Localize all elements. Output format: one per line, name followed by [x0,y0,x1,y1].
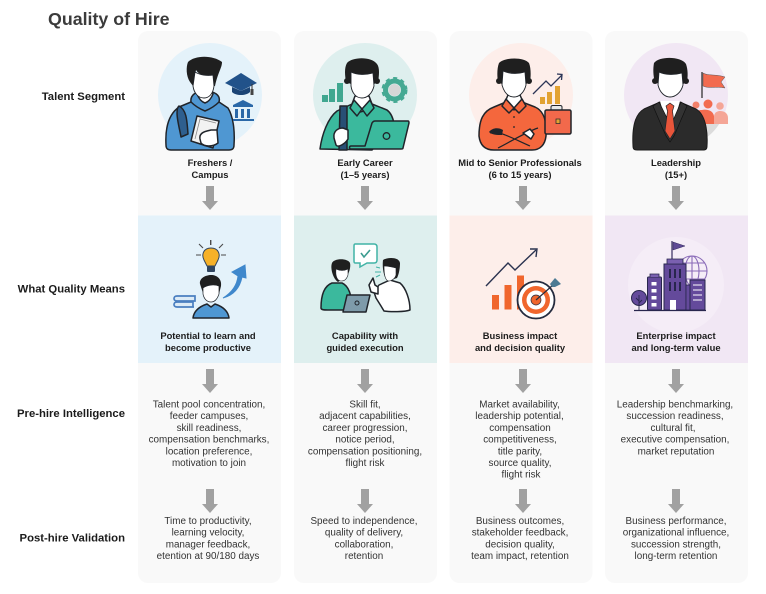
text: post-hire freshers: manager feedback, [166,539,250,550]
text: pre-hire leadership: succession readiness, [626,411,724,422]
label: Potential to learn and become productive: Potential to learn and [160,330,256,341]
text: pre-hire mid-senior: flight risk [502,470,541,481]
label: Business impact and decision quality: Business impact [483,330,557,341]
icon: target and growth chart [486,249,561,318]
text: post-hire early career: quality of delivery, [325,528,403,539]
label: Capability with guided execution: Capability with [332,330,398,341]
arrow [202,489,218,513]
panel: Leadership [605,31,748,583]
label: Capability with guided execution: guided execution [326,342,404,353]
text: pre-hire freshers: skill readiness, [177,423,241,434]
text: post-hire freshers: learning velocity, [172,528,244,539]
icon: fresher student [158,43,262,150]
text: pre-hire freshers: motivation to join [172,458,246,469]
text: pre-hire leadership: Leadership benchmarking, [617,400,733,410]
text: pre-hire leadership: market reputation [638,446,714,457]
row label: Post-hire Validation: Post-hire Validation [20,532,125,544]
text: pre-hire leadership: executive compensation, [621,435,729,446]
text: pre-hire mid-senior: source quality, [489,458,551,469]
text: post-hire mid-senior: decision quality, [485,539,555,550]
label: Enterprise impact and long-term value: and long-term value [631,342,721,353]
row label: Pre-hire Intelligence: Pre-hire Intelligence [17,408,125,420]
arrow [515,186,531,210]
label: Freshers / Campus: Campus [192,169,228,180]
icon: enterprise buildings and globe [628,237,724,333]
panel: Mid to Senior Professionals [450,31,592,583]
label: Potential to learn and become productive: become productive [165,342,251,353]
text: post-hire early career: retention [345,551,383,562]
arrow [202,369,218,393]
icon: learner with bulb and books [174,240,246,318]
text: pre-hire mid-senior: Market availability, [479,400,560,410]
text: post-hire mid-senior: stakeholder feedback, [472,528,568,539]
icon: leader [624,43,728,150]
arrow [357,489,373,513]
text: pre-hire freshers: location preference, [166,446,252,457]
text: pre-hire freshers: feeder campuses, [170,411,248,422]
text: post-hire leadership: succession strength, [631,539,721,550]
text: pre-hire leadership: cultural fit, [650,423,696,434]
text: post-hire mid-senior: Business outcomes, [476,516,564,527]
row label: Talent Segment: Talent Segment [42,91,125,103]
label: Leadership (15+): (15+) [665,169,687,180]
arrow [357,369,373,393]
arrow [668,489,684,513]
icon: early career professional [313,43,417,150]
arrow [668,186,684,210]
text: post-hire mid-senior: team impact, retention [471,551,569,562]
text: post-hire early career: collaboration, [335,539,393,550]
icon: mid-senior professional [469,43,573,150]
text: pre-hire mid-senior: leadership potential, [475,411,564,422]
text: pre-hire early career: Skill fit, [349,400,381,410]
text: pre-hire early career: career progression, [322,423,408,434]
text: pre-hire early career: compensation positioning, [308,446,422,457]
text: pre-hire mid-senior: title parity, [498,446,542,457]
text: pre-hire early career: notice period, [335,435,395,446]
arrow [668,369,684,393]
label: Early Career (1–5 years): Early Career [337,157,393,168]
text: pre-hire early career: adjacent capabilities, [319,411,411,422]
text: post-hire freshers: Time to productivity, [164,516,252,527]
label: Leadership (15+): Leadership [651,157,701,168]
label: Early Career (1–5 years): (1–5 years) [340,169,390,180]
label: Freshers / Campus: Freshers / [188,157,233,168]
text: post-hire early career: Speed to independence, [310,516,418,527]
arrow [357,186,373,210]
panel: Early Career [294,31,437,583]
text: post-hire leadership: long-term retention [635,551,717,562]
label: Mid to Senior Professionals (6 to 15 years): (6 to 15 years) [488,169,552,180]
text: post-hire freshers: etention at 90/180 days [157,551,259,562]
text: pre-hire early career: flight risk [346,458,385,469]
row label: What Quality Means: What Quality Means [18,284,125,296]
text: post-hire leadership: organizational influence, [623,528,729,539]
label: Business impact and decision quality: and decision quality [475,342,566,353]
text: pre-hire freshers: Talent pool concentration, [153,400,265,410]
arrow [515,369,531,393]
text: post-hire leadership: Business performance, [626,516,726,527]
arrow [202,186,218,210]
label: Enterprise impact and long-term value: Enterprise impact [636,330,716,341]
panel: Freshers / Campus [138,31,281,583]
text: pre-hire freshers: compensation benchmarks, [149,435,269,446]
text: pre-hire mid-senior: competitiveness, [483,435,557,446]
text: pre-hire mid-senior: compensation [489,423,551,434]
title: Quality of Hire [48,9,170,29]
icon: mentoring pair [321,244,410,312]
label: Mid to Senior Professionals (6 to 15 years): Mid to Senior Professionals [458,157,582,168]
arrow [515,489,531,513]
